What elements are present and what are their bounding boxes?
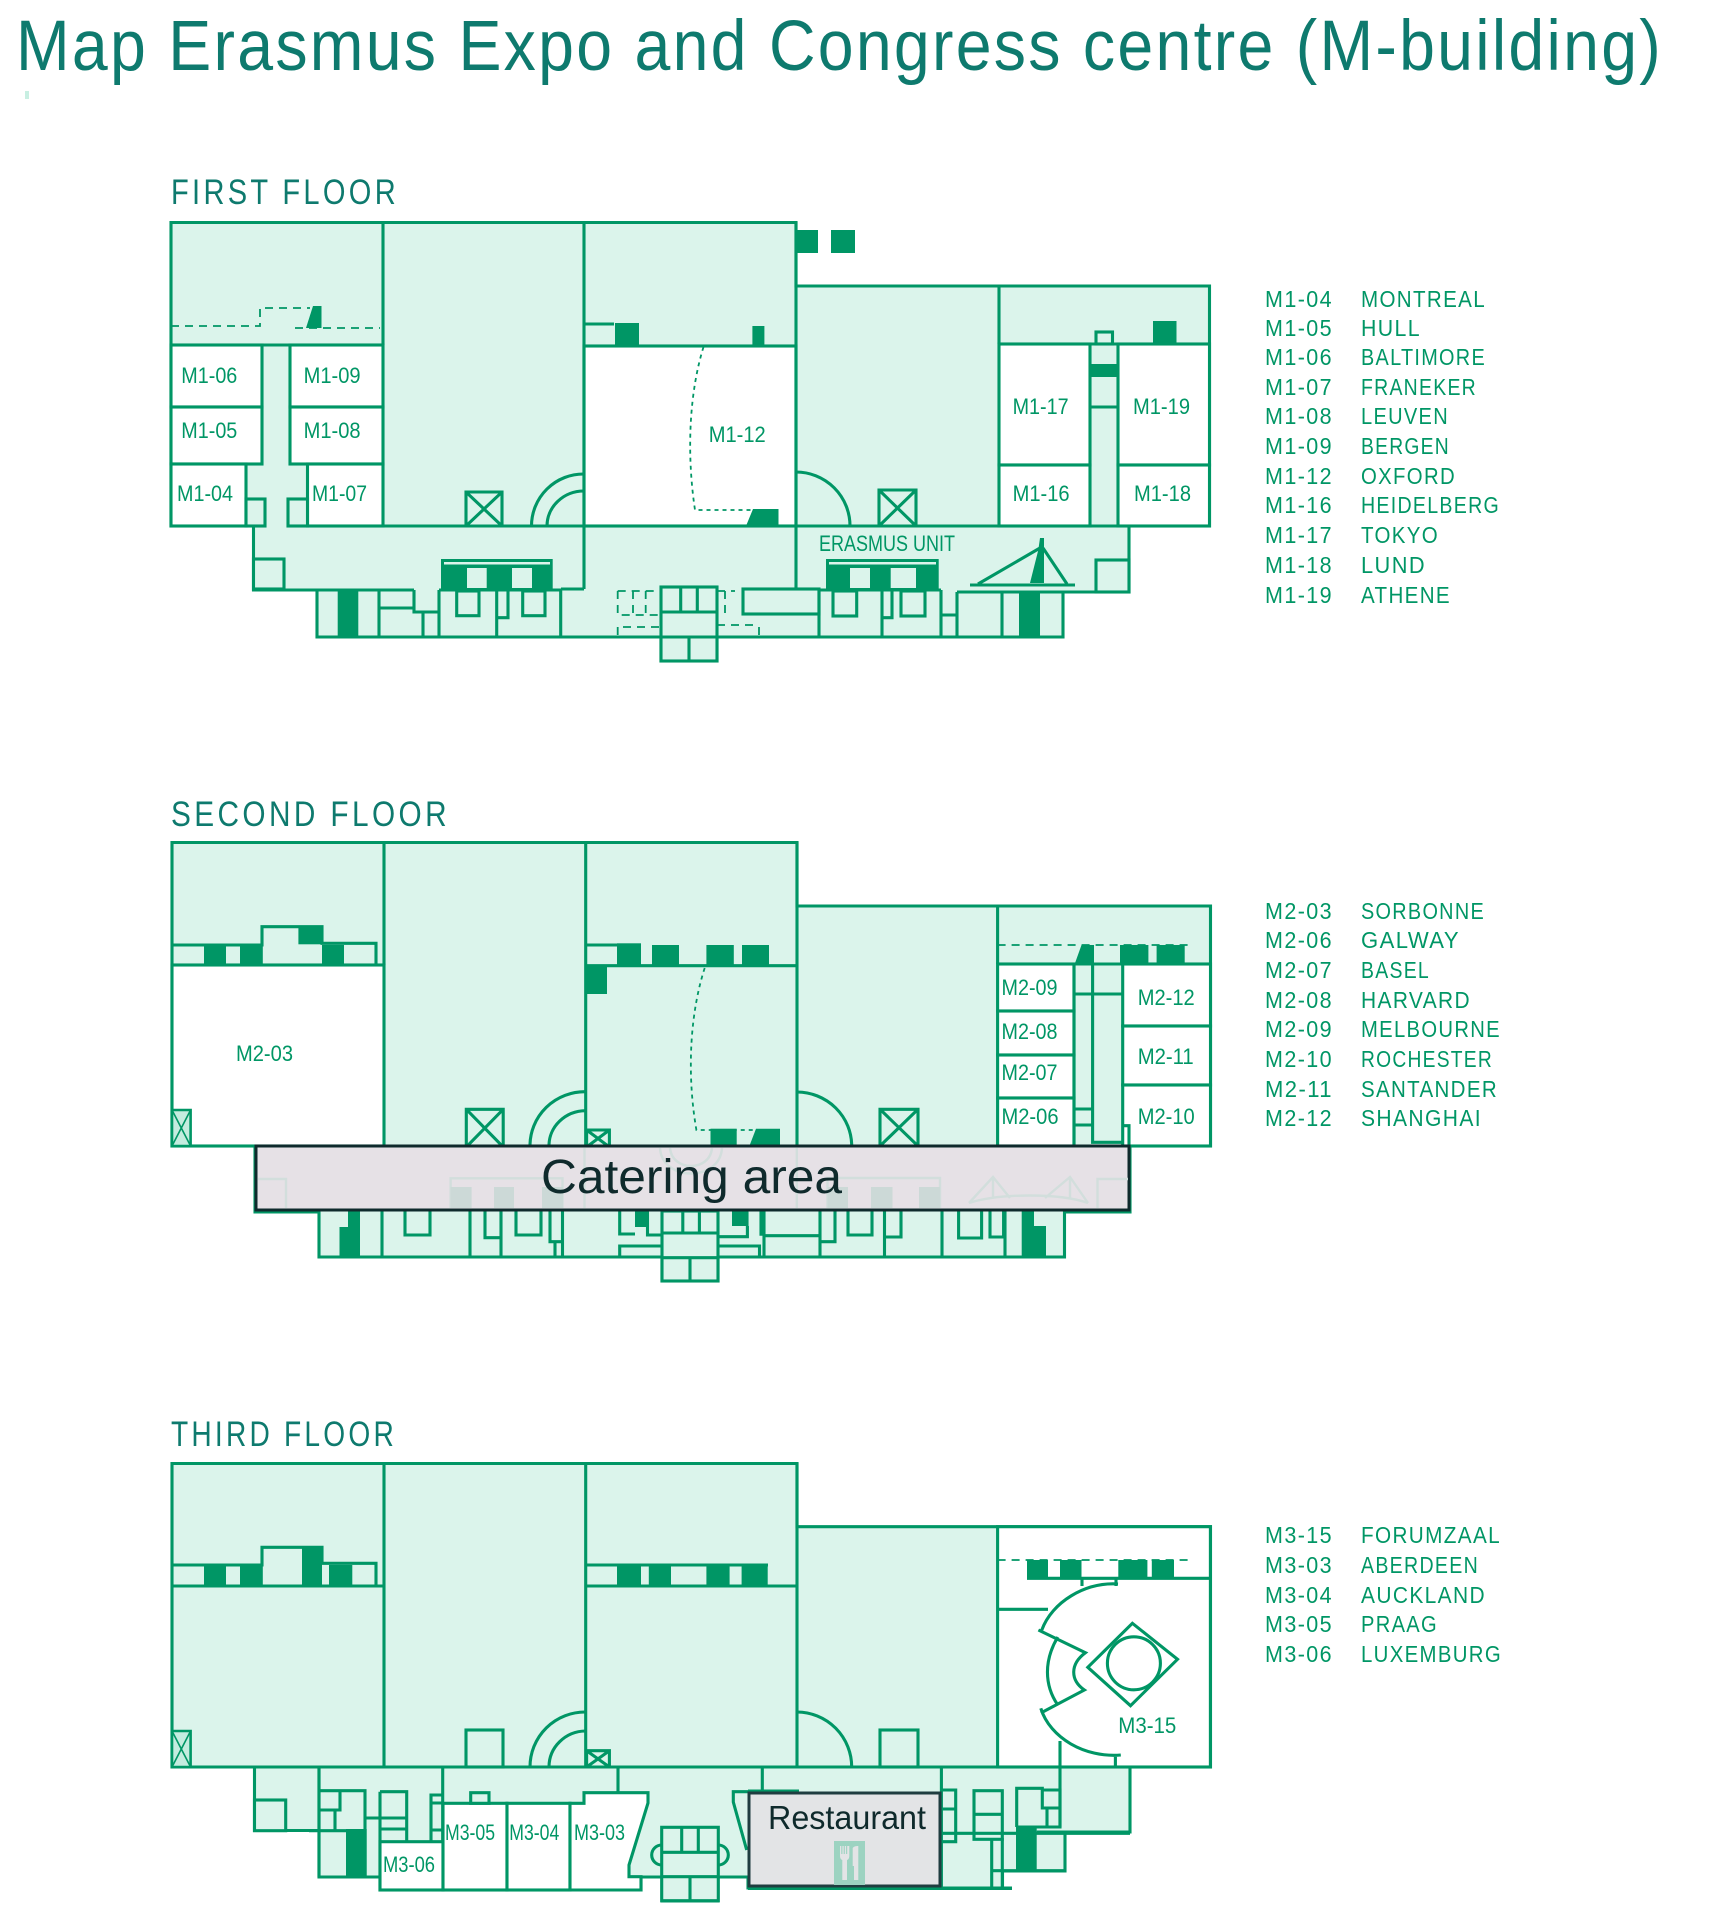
legend: first floor rooms: M1-19 [1265, 582, 1333, 608]
restaurant box [749, 1793, 940, 1886]
room labels first floor: M1-04 [177, 481, 233, 506]
walls first floor [171, 222, 1209, 590]
white rooms first floor [171, 344, 1210, 526]
room labels second floor: M2-11 [1138, 1044, 1194, 1069]
dashed curve M1-12 [690, 347, 751, 510]
rooms M3-03 to M3-06 [380, 1793, 648, 1890]
legend: second floor rooms: M2-03 [1265, 898, 1333, 924]
legend: first floor rooms [1265, 286, 1500, 608]
lift with cross left [172, 1731, 191, 1767]
faded plan under catering overlay [258, 1148, 1128, 1208]
stairs block right [826, 559, 939, 589]
legend: third floor rooms: ABERDEEN [1361, 1552, 1479, 1578]
central stairwell second floor [662, 1211, 718, 1281]
legend: first floor rooms: M1-16 [1265, 492, 1333, 518]
legend: first floor rooms: TOKYO [1361, 522, 1439, 548]
legend: second floor rooms: BASEL [1361, 957, 1430, 983]
restaurant label: Restaurant [768, 1799, 926, 1836]
legend: second floor rooms: M2-12 [1265, 1105, 1333, 1131]
solid blocks second floor [204, 926, 1185, 1147]
legend: third floor rooms [1265, 1522, 1502, 1667]
right wing rooms third floor [718, 1788, 1130, 1890]
legend: first floor rooms: M1-12 [1265, 463, 1333, 489]
legend: second floor rooms: M2-07 [1265, 957, 1333, 983]
left wing rooms third floor [254, 1767, 443, 1877]
legend: first floor rooms: LEUVEN [1361, 403, 1449, 429]
legend: second floor rooms: HARVARD [1361, 987, 1471, 1013]
legend: first floor rooms: HEIDELBERG [1361, 492, 1500, 518]
legend: second floor rooms: SANTANDER [1361, 1076, 1498, 1102]
legend: first floor rooms: M1-05 [1265, 315, 1333, 341]
legend: third floor rooms: FORUMZAAL [1361, 1522, 1501, 1548]
legend: first floor rooms: ATHENE [1361, 582, 1451, 608]
stair arcs second floor [530, 1092, 852, 1146]
lift with cross [879, 490, 916, 526]
room labels first floor: M1-12 [709, 422, 766, 447]
legend: first floor rooms: M1-18 [1265, 552, 1333, 578]
legend: first floor rooms: BALTIMORE [1361, 344, 1486, 370]
room labels first floor: M1-19 [1133, 394, 1190, 419]
legend: second floor rooms: M2-10 [1265, 1046, 1333, 1072]
heading: second floor: SECOND FLOOR [171, 795, 450, 834]
white rooms second floor [172, 964, 1210, 1146]
central stairwell first floor [661, 587, 717, 661]
label erasmus unit: ERASMUS UNIT [819, 531, 955, 556]
legend: second floor rooms: SHANGHAI [1361, 1105, 1482, 1131]
legend: first floor rooms: M1-04 [1265, 286, 1333, 312]
legend: second floor rooms: M2-09 [1265, 1016, 1333, 1042]
icon: fork and knife [834, 1841, 865, 1885]
solid blocks first floor [306, 230, 1176, 526]
room labels third floor [383, 1713, 1176, 1877]
room labels second floor: M2-09 [1002, 975, 1058, 1000]
room labels second floor: M2-12 [1138, 985, 1195, 1010]
floor plan: second floor [172, 842, 1210, 1281]
walls second floor [172, 842, 1210, 1146]
legend: third floor rooms: PRAAG [1361, 1611, 1438, 1637]
dashed lines second floor [998, 944, 1192, 946]
dashed lines first floor [171, 308, 380, 328]
legend: second floor rooms: SORBONNE [1361, 898, 1485, 924]
forumzaal auditorium outline [998, 1578, 1210, 1767]
room labels first floor: M1-07 [312, 481, 367, 506]
room labels first floor: M1-06 [181, 363, 237, 388]
floor plan: third floor [172, 1463, 1210, 1901]
room labels second floor: M2-06 [1002, 1104, 1058, 1129]
lift small with cross [587, 1130, 609, 1147]
heading: third floor: THIRD FLOOR [171, 1415, 397, 1454]
room labels third floor: M3-06 [383, 1852, 435, 1877]
canopy triangle [970, 538, 1075, 585]
room labels second floor: M2-07 [1002, 1060, 1058, 1085]
room labels third floor: M3-15 [1118, 1713, 1176, 1738]
stair arcs [532, 472, 850, 526]
lift small with cross [587, 1751, 609, 1767]
room labels first floor: M1-05 [181, 418, 237, 443]
catering label: Catering area [541, 1151, 842, 1204]
catering area overlay [256, 1146, 1129, 1210]
stairs block left [441, 559, 553, 590]
floor plan: first floor [171, 222, 1210, 661]
legend: first floor rooms: M1-07 [1265, 374, 1333, 400]
legend: first floor rooms: LUND [1361, 552, 1426, 578]
lift with cross left [172, 1110, 191, 1146]
lift shaft right [880, 1730, 918, 1767]
legend: third floor rooms: LUXEMBURG [1361, 1641, 1502, 1667]
legend: third floor rooms: M3-05 [1265, 1611, 1333, 1637]
legend: third floor rooms: M3-04 [1265, 1582, 1333, 1608]
room labels first floor: M1-08 [304, 418, 361, 443]
lower block rooms second floor [340, 1211, 1046, 1257]
dashed line forumzaal [998, 1559, 1192, 1561]
room labels second floor: M2-08 [1002, 1019, 1058, 1044]
lift with cross [466, 492, 502, 526]
legend: second floor rooms: M2-08 [1265, 987, 1333, 1013]
room labels first floor: M1-18 [1134, 481, 1191, 506]
legend: second floor rooms: ROCHESTER [1361, 1046, 1493, 1072]
legend: third floor rooms: M3-06 [1265, 1641, 1333, 1667]
room labels first floor: M1-17 [1013, 394, 1069, 419]
lift shaft [466, 1730, 503, 1767]
legend: first floor rooms: MONTREAL [1361, 286, 1486, 312]
legend: second floor rooms [1265, 898, 1501, 1131]
room labels third floor: M3-04 [509, 1820, 559, 1845]
lift with cross [466, 1109, 503, 1147]
room labels first floor: M1-09 [304, 363, 361, 388]
lower block rooms first floor [338, 589, 1129, 637]
corridors second floor [1074, 964, 1129, 1146]
legend: second floor rooms: M2-06 [1265, 927, 1333, 953]
legend: first floor rooms: M1-17 [1265, 522, 1333, 548]
legend: first floor rooms: M1-09 [1265, 433, 1333, 459]
room labels third floor: M3-05 [445, 1820, 495, 1845]
legend: first floor rooms: FRANEKER [1361, 374, 1477, 400]
forumzaal diamond and circle [1088, 1623, 1178, 1706]
legend: first floor rooms: M1-08 [1265, 403, 1333, 429]
room labels second floor: M2-10 [1138, 1104, 1195, 1129]
small service boxes first floor [246, 332, 1129, 592]
solid blocks forumzaal [1027, 1560, 1174, 1578]
walls third floor [172, 1463, 1210, 1890]
legend: second floor rooms: M2-11 [1265, 1076, 1333, 1102]
legend: second floor rooms: MELBOURNE [1361, 1016, 1501, 1042]
solid blocks third floor [204, 1547, 768, 1586]
room labels first floor [177, 363, 1191, 506]
legend: second floor rooms: GALWAY [1361, 927, 1460, 953]
legend: first floor rooms: HULL [1361, 315, 1421, 341]
room labels first floor: M1-16 [1013, 481, 1070, 506]
dashed curve second floor [691, 968, 753, 1130]
legend: first floor rooms: OXFORD [1361, 463, 1456, 489]
room labels second floor [236, 975, 1195, 1129]
legend: third floor rooms: M3-15 [1265, 1522, 1333, 1548]
legend: third floor rooms: M3-03 [1265, 1552, 1333, 1578]
room labels second floor: M2-03 [236, 1041, 293, 1066]
room labels third floor: M3-03 [574, 1820, 625, 1845]
forumzaal white room [998, 1527, 1210, 1767]
heading: first floor: FIRST FLOOR [171, 173, 399, 212]
legend: first floor rooms: M1-06 [1265, 344, 1333, 370]
central stairwell third floor [652, 1827, 728, 1901]
lift with cross right [880, 1109, 918, 1146]
stair arcs third floor [530, 1712, 852, 1767]
legend: first floor rooms: BERGEN [1361, 433, 1450, 459]
legend: third floor rooms: AUCKLAND [1361, 1582, 1486, 1608]
